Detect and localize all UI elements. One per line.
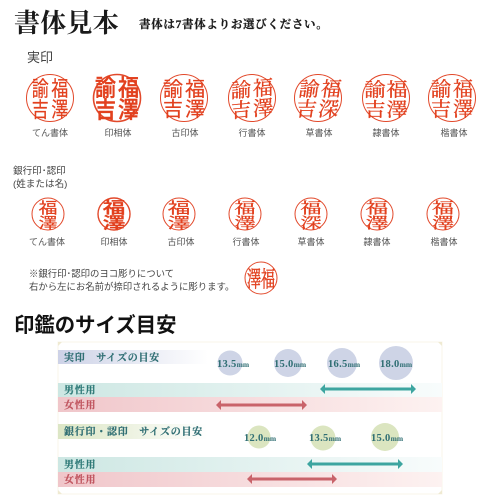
- stamp: 隷書体: [362, 74, 410, 122]
- note text: ※銀行印･認印のヨコ彫りについて: [29, 268, 174, 279]
- labels: 銀行印・認印 typefaces: 古印体: [167, 236, 195, 247]
- stamp: 隷書体 small: 澤: [366, 215, 388, 232]
- circle: 15.0mm: 15.0mm: [371, 433, 404, 444]
- stamp row: 銀行印・認印: [32, 198, 459, 233]
- stamp: 印相体 small: [98, 198, 130, 233]
- stamp: horizontal example: 福: [261, 268, 275, 293]
- circle: 13.5mm: [309, 426, 342, 450]
- title: 書体見本: 書体見本: [14, 8, 119, 38]
- stamp: horizontal example: 澤: [247, 268, 261, 293]
- labels: 実印 typefaces: 隷書体: [372, 127, 400, 138]
- stamp: てん書体 small: [32, 198, 64, 232]
- stamp: 行書体: 吉: [231, 98, 251, 123]
- stamp: 印相体: [94, 74, 140, 123]
- heading: 実印: 実印: [27, 50, 53, 65]
- stamp: 行書体 small: 福: [234, 200, 256, 216]
- bar: 女性用 (銀行印): 女性用: [64, 473, 96, 486]
- heading: 印鑑のサイズ目安: 印鑑のサイズ目安: [14, 313, 177, 337]
- stamp: 隷書体: 福: [387, 79, 408, 101]
- stamp: 草書体 small: [295, 198, 327, 231]
- stamp: 古印体: 福: [185, 78, 205, 101]
- stamp: 行書体: 諭: [231, 78, 251, 103]
- stamp: 行書体: 澤: [253, 96, 273, 121]
- stamp: 隷書体 small: [361, 198, 393, 232]
- stamp row: 実印: [26, 74, 476, 123]
- arrow: female 実印 range: [216, 400, 307, 410]
- stamp: 行書体 small: [229, 198, 261, 231]
- stamp: てん書体: 澤: [51, 98, 68, 122]
- stamp: てん書体: 福: [51, 77, 68, 101]
- stamp: 草書体: [294, 74, 343, 122]
- stamp: 隷書体 small: 福: [366, 200, 388, 217]
- circle: 16.5mm: 16.5mm: [328, 359, 361, 370]
- stamp: 隷書体: 諭: [364, 79, 385, 101]
- stamp: 隷書体: 澤: [387, 99, 408, 121]
- arrow: female 銀行印 range: [247, 474, 337, 484]
- circle: 15.0mm: 15.0mm: [274, 359, 307, 370]
- stamp: てん書体: [26, 74, 74, 122]
- stamp: 楷書体: 諭: [431, 78, 451, 101]
- labels: 銀行印・認印 typefaces: 草書体: [297, 236, 325, 247]
- heading: 銀行印・認印: (姓または名): [13, 178, 67, 190]
- stamp: 楷書体 small: 福: [432, 200, 454, 217]
- stamp: てん書体: 吉: [32, 98, 49, 122]
- stamp: 印相体: 澤: [118, 97, 139, 123]
- labels: 実印 typefaces: 古印体: [171, 127, 199, 138]
- stamp: 楷書体: 福: [453, 78, 473, 101]
- stamp: てん書体 small: 福: [39, 200, 57, 217]
- stamp: 草書体: 諭: [298, 78, 321, 101]
- circle: 15.0mm: [371, 423, 404, 451]
- heading: 銀行印・認印: 銀行印･認印: [13, 165, 66, 177]
- stamp: 印相体 small: 福: [103, 199, 125, 217]
- stamp: 古印体 small: 福: [168, 200, 190, 217]
- bar: 銀行印・認印 header: 銀行印・認印 サイズの目安: [64, 425, 203, 438]
- stamp: 草書体: 吉: [295, 98, 318, 121]
- panel: size guide: [58, 342, 442, 494]
- labels: 銀行印・認印 typefaces: 楷書体: [430, 236, 458, 247]
- stamp: 草書体 small: 深: [300, 215, 322, 231]
- bar: 男性用 (実印): [58, 383, 442, 397]
- stamp: 行書体 small: 澤: [234, 215, 256, 231]
- stamp: 印相体: 諭: [95, 75, 116, 101]
- labels: 銀行印・認印 typefaces: [29, 236, 458, 247]
- stamp: 古印体 small: [163, 198, 195, 232]
- bar: 実印 header: [58, 350, 208, 364]
- stamp: 古印体 small: 澤: [168, 215, 190, 232]
- bar: 銀行印・認印 header: [58, 424, 208, 439]
- labels: 銀行印・認印 typefaces: 隷書体: [363, 236, 391, 247]
- stamp: てん書体 small: 澤: [39, 215, 57, 232]
- stamp: 楷書体 small: [427, 198, 459, 232]
- labels: 実印 typefaces: てん書体: [32, 127, 68, 138]
- stamp: 草書体: 深: [317, 98, 340, 121]
- labels: 銀行印・認印 typefaces: 印相体: [100, 236, 128, 247]
- stamp: てん書体: 諭: [32, 77, 49, 101]
- arrow: male 実印 range: [320, 384, 416, 394]
- stamp: 楷書体: [428, 74, 476, 122]
- stamp: 楷書体 small: 澤: [432, 215, 454, 232]
- labels: 実印 typefaces: 楷書体: [440, 127, 468, 138]
- circle: 18.0mm: [379, 346, 413, 380]
- note text: 右から左にお名前が捺印されるように彫ります。: [29, 281, 234, 292]
- stamp: 古印体: 諭: [163, 78, 183, 101]
- heading: 銀行印・認印: [13, 165, 67, 190]
- circle: 13.5mm: 13.5mm: [217, 359, 250, 370]
- bar: 男性用 (実印): 男性用: [64, 384, 96, 396]
- stamp: 草書体: 福: [320, 78, 343, 101]
- circle: 15.0mm: [274, 349, 307, 377]
- arrow: male 銀行印 range: [307, 459, 403, 469]
- circle: 12.0mm: 12.0mm: [244, 433, 277, 444]
- labels: 銀行印・認印 typefaces: 行書体: [232, 236, 260, 247]
- note text: [29, 268, 234, 292]
- labels: 実印 typefaces: 草書体: [305, 127, 333, 138]
- circle: 13.5mm: 13.5mm: [309, 433, 342, 444]
- stamp: 印相体: 福: [118, 75, 139, 101]
- stamp: 印相体: 吉: [95, 97, 116, 123]
- stamp: 行書体: [228, 74, 276, 123]
- stamp: 古印体: 澤: [185, 98, 205, 121]
- stamp: 古印体: 吉: [163, 98, 183, 121]
- stamp: 楷書体: 吉: [431, 98, 451, 121]
- labels: 銀行印・認印 typefaces: てん書体: [29, 236, 65, 247]
- subtitle: 書体は7書体よりお選びください。: [139, 17, 328, 31]
- circle: 18.0mm: 18.0mm: [380, 359, 413, 370]
- bar: 女性用 (銀行印): [58, 472, 442, 487]
- bar: 女性用 (実印): [58, 397, 442, 412]
- bar: 女性用 (実印): 女性用: [64, 398, 96, 412]
- stamp: 古印体: [160, 74, 208, 122]
- labels: 実印 typefaces: 行書体: [238, 127, 266, 138]
- circle: 13.5mm: [217, 350, 250, 376]
- stamp: horizontal example: [245, 262, 277, 294]
- circle: 16.5mm: [327, 348, 361, 378]
- stamp: 楷書体: 澤: [453, 98, 473, 121]
- stamp: 草書体 small: 福: [300, 200, 322, 216]
- bar: 実印 header: 実印 サイズの目安: [64, 351, 160, 364]
- labels: 実印 typefaces: 印相体: [104, 127, 132, 138]
- bar: 男性用 (銀行印): [58, 457, 442, 472]
- stamp: 隷書体: 吉: [364, 99, 385, 121]
- labels: 実印 typefaces: [32, 127, 468, 138]
- circle: 12.0mm: [244, 426, 277, 448]
- bar: 男性用 (銀行印): 男性用: [64, 458, 96, 471]
- stamp: 印相体 small: 澤: [103, 215, 125, 233]
- stamp: 行書体: 福: [253, 76, 273, 101]
